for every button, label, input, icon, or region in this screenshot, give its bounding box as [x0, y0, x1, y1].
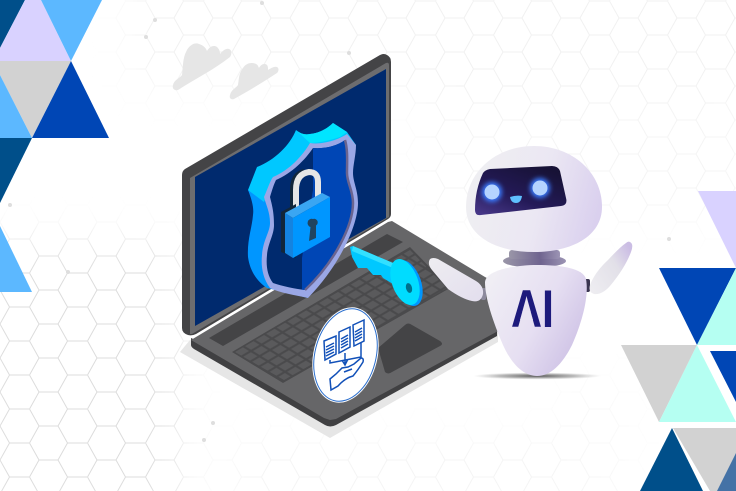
neck: lower ring [503, 254, 566, 268]
lid: screen [195, 69, 386, 326]
neck: upper ring [509, 250, 560, 259]
robot: neck [503, 250, 566, 268]
icon: large cloud [173, 43, 231, 90]
robot: right arm joint [584, 279, 590, 292]
key: blade [350, 246, 393, 284]
padlock: shackle shadow [292, 171, 304, 212]
triangles: right cluster [621, 191, 736, 491]
shield: inner left [267, 140, 353, 290]
key: head face [385, 255, 425, 309]
shield: 3D side lower [248, 190, 308, 298]
robot: right eye [532, 180, 548, 196]
laptop: base underside [191, 322, 497, 426]
shield: 3D top highlight [296, 123, 347, 143]
lid: bezel [190, 63, 389, 334]
icon: security shield [248, 123, 358, 298]
padlock: keyhole [308, 219, 318, 241]
badge: white disc [303, 300, 388, 410]
keyboard: well [232, 247, 450, 383]
lid: outer frame [182, 54, 391, 335]
robot: smile [510, 196, 522, 203]
robot: head [466, 146, 602, 252]
robot: visor [475, 166, 566, 215]
laptop: deck [191, 221, 500, 420]
icon: open hand [330, 358, 363, 390]
robot: right eye glow [530, 178, 550, 198]
laptop: ground shadow [180, 320, 498, 438]
robot: AI label: AI [511, 280, 554, 339]
icon: small cloud [230, 63, 278, 99]
laptop: lid [182, 54, 391, 335]
robot: left arm joint [481, 288, 486, 300]
robot: right arm [590, 242, 632, 294]
padlock: shackle [296, 172, 318, 212]
shield: inner shadow edge [305, 140, 353, 290]
icon: three documents [324, 320, 364, 360]
robot: left eye [484, 184, 500, 200]
robot: ground shadow [473, 372, 601, 380]
padlock: body shadow [281, 204, 296, 258]
robot: torso [485, 265, 587, 376]
robot [429, 146, 632, 380]
laptop [180, 54, 500, 438]
icon: cyan key [350, 246, 428, 310]
shield: rim [262, 134, 358, 298]
padlock: left face [285, 213, 293, 258]
padlock: top face [285, 193, 330, 218]
badge: blue ring [305, 302, 386, 408]
shield: 3D side upper [248, 123, 356, 202]
robot: left eye glow [482, 182, 502, 202]
robot: AI crossbar cover [520, 311, 533, 320]
triangles: top left cluster [0, 0, 109, 292]
badge: data in hand [303, 300, 388, 410]
key: hole [405, 282, 413, 294]
padlock: front face [293, 197, 330, 258]
laptop: keyboard [232, 247, 450, 383]
padlock [281, 171, 330, 258]
keyboard: keys [235, 250, 447, 380]
robot: left arm [429, 258, 483, 301]
laptop: touchpad [378, 324, 442, 374]
icon: connector and arrow [330, 343, 361, 365]
key: head side [388, 256, 428, 310]
key: blade highlight [352, 246, 393, 268]
shield: inner right [302, 140, 352, 290]
laptop: hinge strip [209, 234, 403, 346]
